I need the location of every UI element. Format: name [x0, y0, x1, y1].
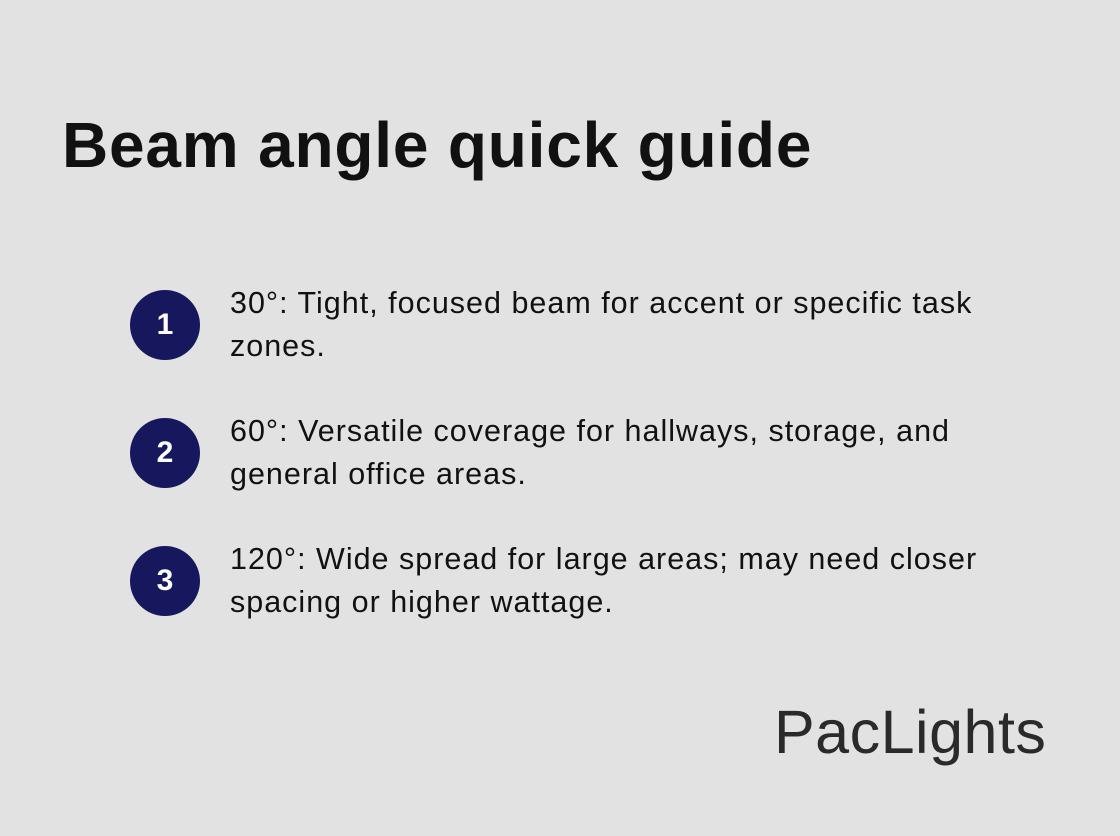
logo: PacLights — [774, 698, 1046, 766]
text 1: 30°: Tight, focused beam for accent or specific task zones. — [230, 286, 972, 363]
item 1 — [130, 286, 972, 363]
badge 2 — [130, 418, 200, 488]
text 2: 60°: Versatile coverage for hallways, storage, and general office areas. — [230, 414, 950, 491]
title: Beam angle quick guide — [62, 109, 812, 181]
badge 1: 1 — [157, 308, 173, 341]
item 2 — [130, 414, 950, 491]
item 3 — [130, 542, 977, 619]
badge 3 — [130, 546, 200, 616]
text 3: 120°: Wide spread for large areas; may need closer spacing or higher wattage. — [230, 542, 977, 619]
badge 1 — [130, 290, 200, 360]
badge 3: 3 — [157, 564, 173, 597]
badge 2: 2 — [157, 436, 173, 469]
